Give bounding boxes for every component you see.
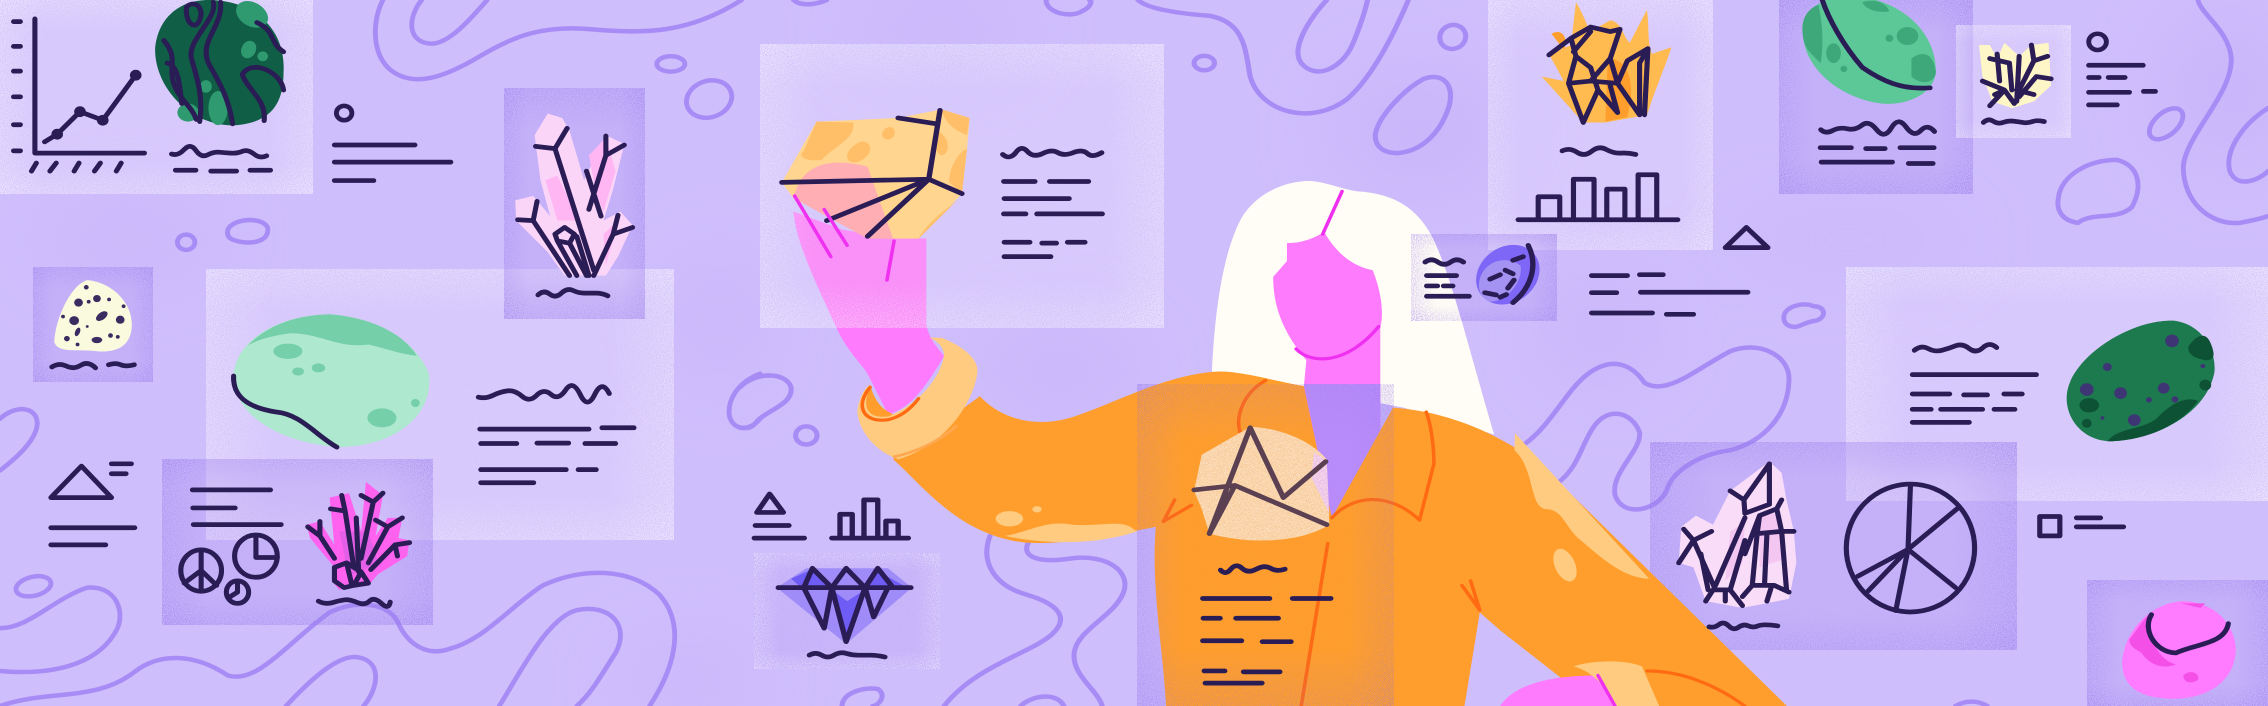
panel: cream crystal card — [1956, 25, 2071, 138]
details: right zone — [1500, 0, 2236, 706]
raised forearm and hand — [794, 212, 944, 414]
crystal caption — [538, 290, 608, 296]
green rock text — [1820, 122, 1934, 163]
bar chart — [1518, 175, 1678, 220]
triangle with lines — [51, 464, 135, 545]
icon: green rock with vein — [1802, 0, 1936, 104]
jacket — [893, 371, 1787, 706]
icon: pale green rock — [234, 314, 429, 447]
icon: dark green striped rock — [155, 0, 284, 125]
panel grain: rock description card — [760, 44, 1164, 328]
small card text — [1425, 260, 1469, 296]
icon: cream speckled rock — [54, 280, 132, 352]
icon: small purple rock — [1463, 234, 1553, 315]
details: centre zone — [754, 109, 1553, 683]
panel grain: small rock card over hair — [1411, 234, 1557, 321]
hand tint inside card — [794, 212, 926, 328]
jacket highlights — [996, 433, 1649, 584]
square with lines — [2040, 516, 2124, 536]
icon: pink rock — [2122, 601, 2236, 699]
pie chart card text — [192, 490, 281, 525]
bar chart icon — [832, 500, 908, 538]
dark green rock text — [1912, 344, 2036, 422]
icon: diamond — [777, 568, 912, 644]
orange crystal caption — [1562, 148, 1636, 154]
icon: pale crystal cluster — [1679, 462, 1796, 608]
jacket seams — [1239, 381, 1266, 432]
icon: rock in hand — [782, 109, 970, 239]
sleeve cuff — [857, 338, 978, 459]
pale green rock text — [478, 385, 634, 483]
background blob lines: centre — [740, 0, 1470, 706]
pie chart — [1846, 484, 1975, 612]
face and neck — [1273, 232, 1382, 518]
green rock caption — [172, 146, 270, 171]
panel grain: chest card over jacket — [1137, 384, 1394, 706]
diamond caption — [809, 653, 885, 657]
background blob lines: left — [0, 0, 760, 706]
neck tinted by card — [1304, 384, 1380, 518]
lower hand and cuff — [1500, 661, 1745, 706]
finger lines — [795, 196, 894, 280]
line chart — [14, 19, 144, 171]
cream crystal caption — [1983, 120, 2044, 123]
triangle — [1725, 227, 1768, 248]
text lines by triangle — [1592, 275, 1748, 314]
details: left zone — [14, 0, 634, 606]
background blob lines: right — [1515, 0, 2268, 706]
icon: rock on chest — [1194, 427, 1329, 540]
icon: magenta crystal — [306, 482, 410, 590]
hair parting — [1323, 191, 1342, 234]
heading lines with circle — [334, 106, 451, 181]
icon: cream crystal — [1979, 43, 2051, 108]
small triangle with lines — [754, 494, 804, 538]
chest card text — [1203, 566, 1331, 683]
icon: pale pink crystal — [515, 113, 633, 276]
hair — [1212, 181, 1494, 435]
pie chart icons — [181, 535, 277, 603]
rock description text — [1003, 148, 1102, 257]
figure: woman holding a rock — [794, 181, 1787, 706]
cream rock caption — [52, 363, 134, 368]
jaw line — [1296, 326, 1379, 359]
magenta crystal caption — [318, 599, 390, 606]
heading lines with circle — [2089, 34, 2155, 105]
icon: dark green rock — [2067, 321, 2215, 441]
icon: orange crystal — [1542, 2, 1671, 122]
crystal cluster caption — [1709, 623, 1778, 629]
